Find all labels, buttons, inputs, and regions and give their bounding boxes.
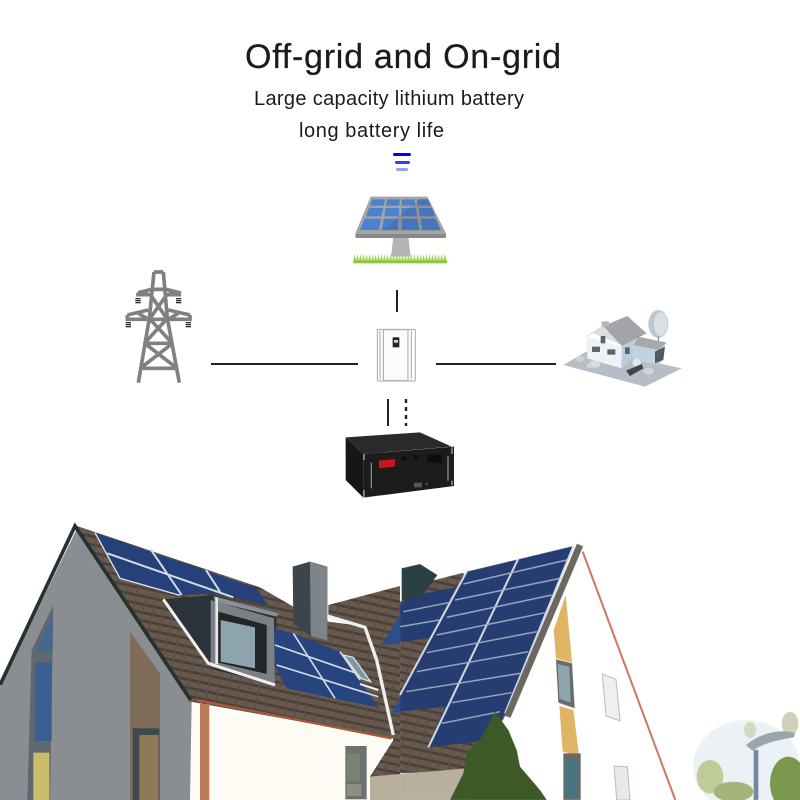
tree [450,712,547,800]
icon: inverter [377,329,415,381]
recess in gable [130,632,160,800]
background foliage [693,712,800,800]
photo: house with rooftop solar, right part [400,545,800,800]
icon: house model [563,310,682,387]
orange rake fascia [583,552,675,800]
grey gable wall [0,531,192,800]
icon: battery rack [346,432,454,498]
connector: solar to inverter [396,290,398,312]
small panels near right edge [382,615,400,713]
subtitle line 1: Large capacity lithium battery [254,88,524,110]
rear roof [400,573,507,773]
chimney [293,562,327,641]
photo: house with rooftop solar, left part [0,525,400,800]
upper solar array [95,533,267,605]
large solar array [400,546,573,747]
dormer [163,595,278,685]
downpipe [200,704,209,800]
rear roof [328,586,400,777]
connector: inverter to battery solid [387,399,389,426]
subtitle line 2: long battery life [299,120,444,142]
icon: transmission tower [126,272,191,383]
small solar array [400,587,456,642]
connector: tower to inverter [211,363,358,365]
yellow wall strip [554,595,579,756]
white wall [190,707,393,800]
connector: inverter to battery dashed [405,399,407,426]
chimney [402,564,437,600]
icon: solar panel [353,197,447,263]
recess window [133,728,159,800]
windows [556,659,630,800]
white gable wall [467,545,675,800]
rear wall stub [370,774,400,800]
gable edge [0,526,191,700]
rear wall [400,768,467,800]
tall gable window [27,605,53,800]
title: Off-grid and On-grid [245,38,561,76]
white roof flashing [327,616,393,735]
street lamp [746,731,795,800]
icon: blue signal bars [393,153,411,171]
lower solar array [274,628,378,707]
main roof [74,525,393,738]
roof rake edge [507,545,580,717]
gutter [197,700,392,738]
white wall window [345,746,367,799]
connector: inverter to house [436,363,556,365]
